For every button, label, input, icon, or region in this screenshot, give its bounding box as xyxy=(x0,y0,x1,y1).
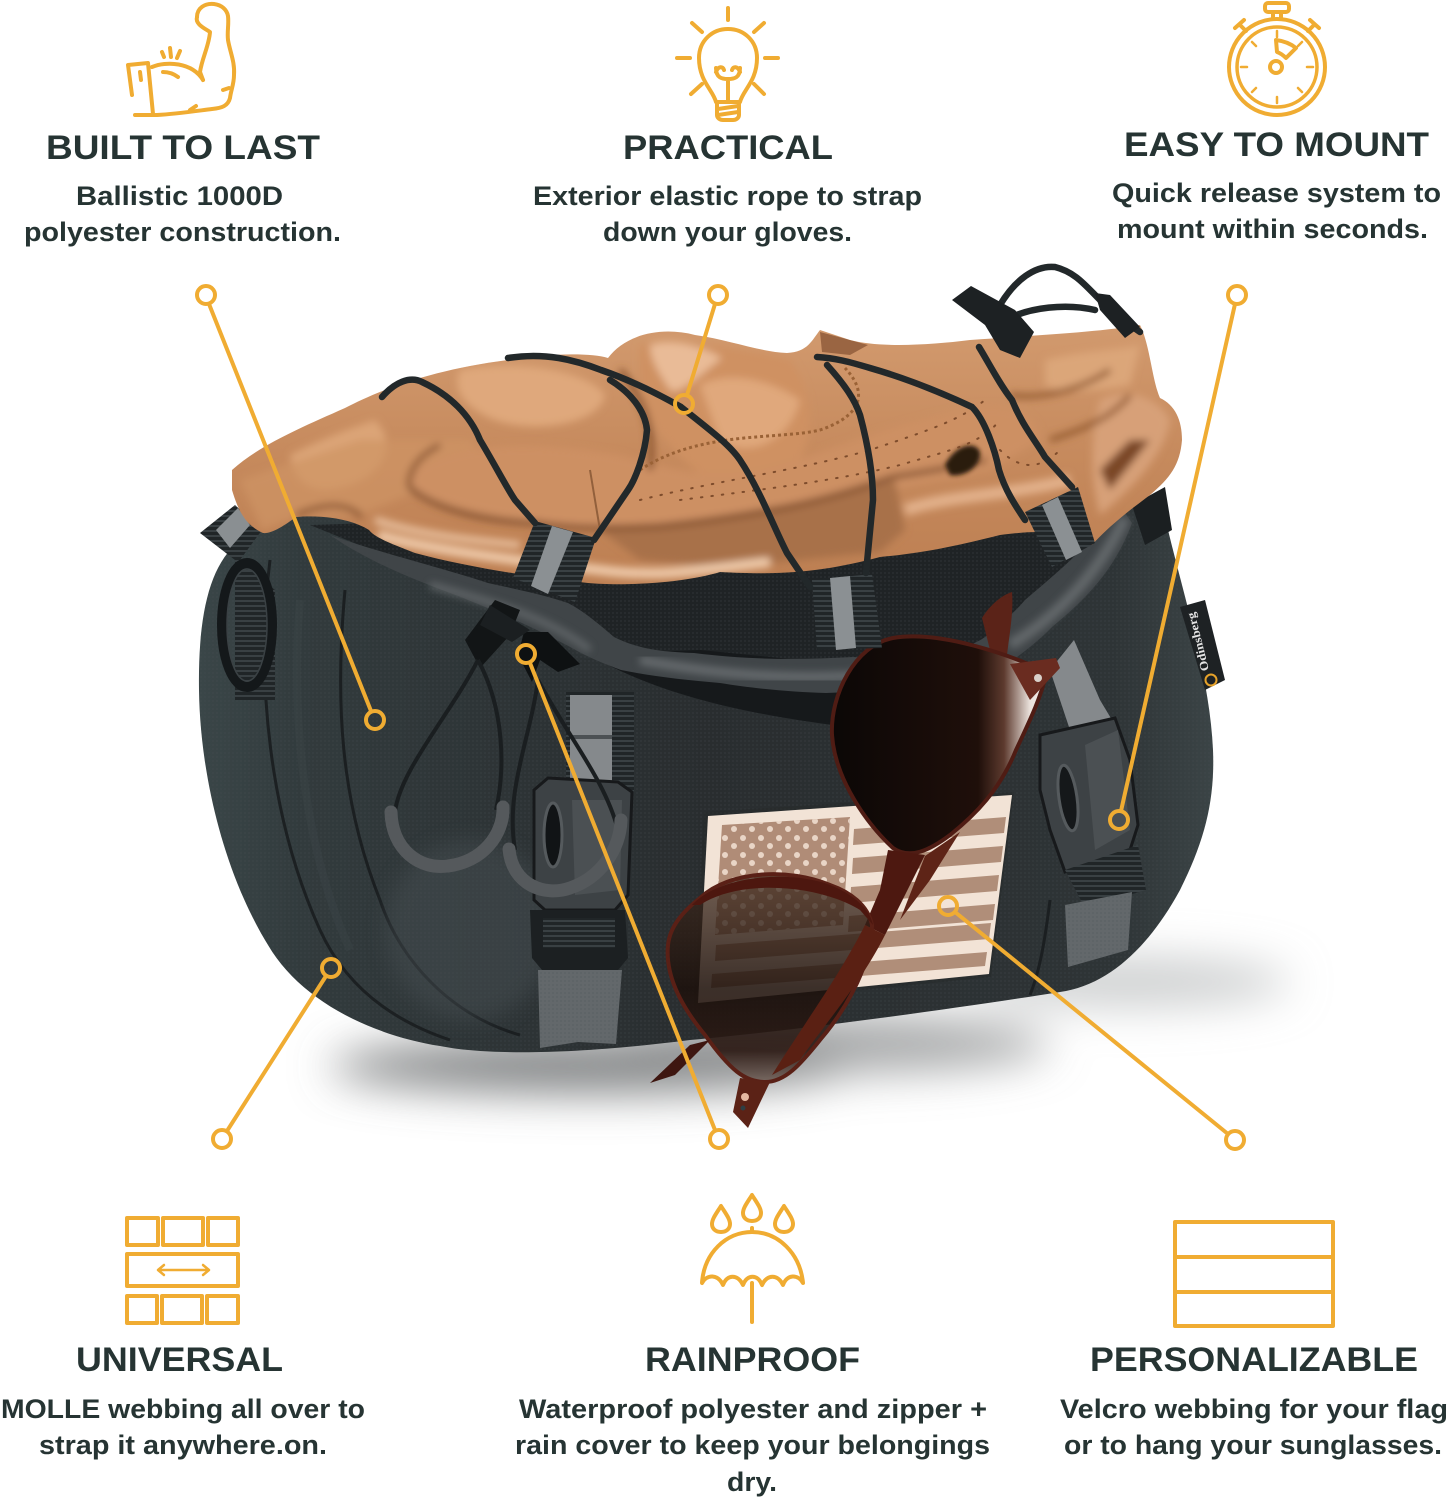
webbing loops with reflective stripes xyxy=(513,487,1095,650)
icon: molle webbing grid xyxy=(127,1218,238,1323)
glove shading xyxy=(240,332,1170,573)
highlights xyxy=(378,535,770,573)
lower lens xyxy=(668,874,872,1082)
icon: flexed arm xyxy=(128,4,234,115)
text: built to last description: polyester construction. xyxy=(24,217,341,247)
text: rainproof description: dry. xyxy=(727,1467,777,1497)
text: practical description: down your gloves. xyxy=(603,217,852,247)
gloves xyxy=(232,325,1182,584)
heading: personalizable: PERSONALIZABLE xyxy=(1090,1341,1418,1379)
left strap and buckle xyxy=(530,692,634,1048)
callout line: molle webbing xyxy=(213,959,340,1148)
text: universal description: MOLLE webbing all over to xyxy=(1,1394,365,1424)
perforations xyxy=(640,400,1060,500)
flag patch xyxy=(694,792,1014,1007)
heading: built to last: BUILT TO LAST xyxy=(46,129,320,167)
callout line: elastic rope xyxy=(675,286,727,413)
text: rainproof description: Waterproof polyester and zipper + xyxy=(519,1394,987,1424)
callout line: quick release buckle xyxy=(1110,286,1246,829)
heading: easy to mount: EASY TO MOUNT xyxy=(1124,126,1429,164)
lower glove xyxy=(600,480,905,568)
heading: rainproof: RAINPROOF xyxy=(645,1341,860,1379)
lower temple arm xyxy=(772,925,885,1075)
zipper pulls and cord loops xyxy=(391,600,621,891)
text: built to last description: Ballistic 1000D xyxy=(76,181,283,211)
sunglasses xyxy=(650,592,1060,1128)
text: built to last description xyxy=(24,181,341,247)
zip band xyxy=(330,500,1132,693)
callout line: durable fabric xyxy=(197,286,384,729)
heading: practical: PRACTICAL xyxy=(623,129,833,167)
text: rainproof description: rain cover to keep your belongings xyxy=(515,1430,990,1460)
text: easy to mount description: mount within seconds. xyxy=(1117,214,1428,244)
callout line: velcro patch xyxy=(939,897,1244,1149)
icon: umbrella with rain drops xyxy=(702,1195,803,1322)
bag body xyxy=(199,487,1213,1052)
left shoulder strap and D-ring xyxy=(200,505,275,700)
right strap and side-release buckle xyxy=(1040,640,1146,967)
callout line: waterproof zipper xyxy=(517,645,728,1148)
upper glove fingers mid tone xyxy=(422,450,994,528)
text: universal description: strap it anywhere.on. xyxy=(39,1430,327,1460)
icon: velcro panel xyxy=(1175,1222,1333,1326)
text: universal description xyxy=(1,1394,365,1460)
text: practical description: Exterior elastic rope to strap xyxy=(533,181,922,211)
text: practical description xyxy=(533,181,922,247)
product photo: motorcycle bag with gloves and sunglasses xyxy=(197,267,1290,1149)
upper temple arm xyxy=(982,592,1012,665)
text: personalizable description xyxy=(1060,1394,1448,1460)
creases xyxy=(409,460,986,528)
top fabric panel and zipper band xyxy=(310,500,1132,726)
brand tag: Odinsberg xyxy=(1184,611,1212,673)
ground shadow xyxy=(330,958,1290,1092)
upper lens xyxy=(832,636,1047,853)
heading: universal: UNIVERSAL xyxy=(76,1341,283,1379)
icon: light bulb xyxy=(677,8,778,120)
text: easy to mount description: Quick release system to xyxy=(1112,178,1441,208)
dark panel below zip band xyxy=(590,650,1000,726)
pocket seams xyxy=(341,590,520,1035)
icon: stopwatch xyxy=(1229,3,1325,115)
rear right strap xyxy=(1132,487,1172,545)
gap between fingers xyxy=(945,446,980,475)
text: personalizable description: or to hang your sunglasses. xyxy=(1064,1430,1442,1460)
text: personalizable description: Velcro webbing for your flag xyxy=(1060,1394,1448,1424)
bridge and hinge xyxy=(865,850,925,935)
cord lock xyxy=(952,286,1034,358)
brand tag xyxy=(1180,600,1225,690)
text: easy to mount description xyxy=(1112,178,1441,244)
text: rainproof description xyxy=(515,1394,990,1497)
elastic ropes xyxy=(382,267,1140,587)
